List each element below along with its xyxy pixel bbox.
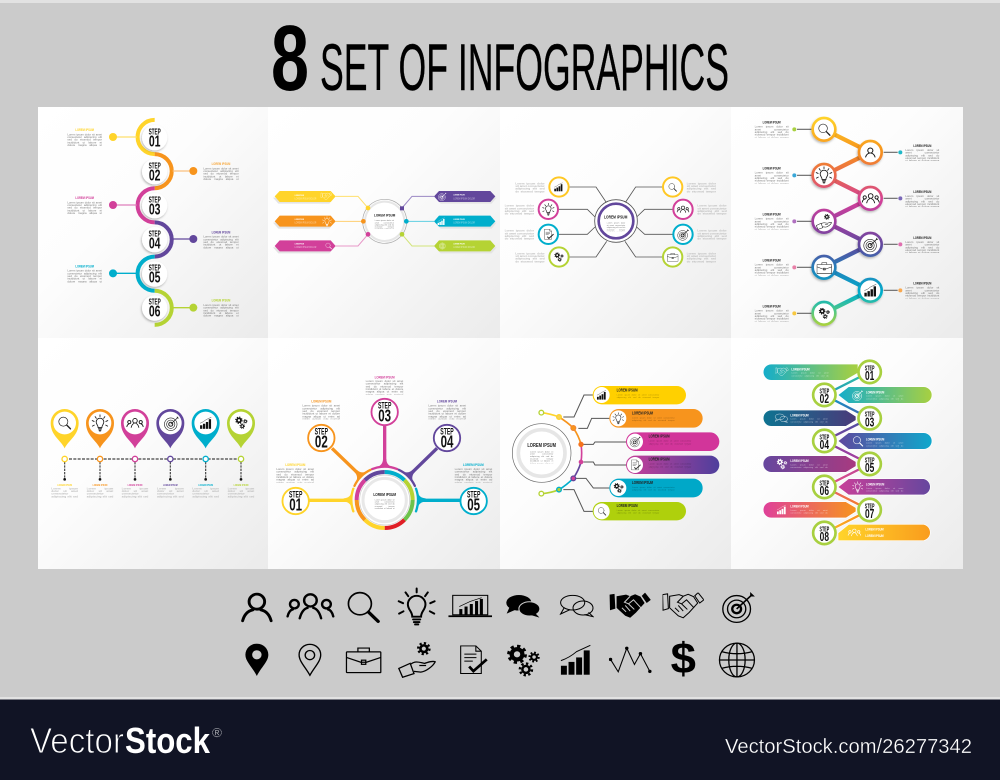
step 01: LOREM IPSUM bbox=[75, 128, 94, 132]
icon: document check bbox=[461, 646, 487, 673]
bar row 3 bbox=[763, 410, 856, 426]
bar row 2 bbox=[838, 387, 932, 403]
side text labels: LOREM IPSUM bbox=[763, 305, 781, 309]
hub connector lines bbox=[559, 187, 673, 257]
icon: filled handshake bbox=[610, 593, 651, 618]
step 02 arm: 02 bbox=[315, 433, 328, 452]
step 04: 04 bbox=[820, 438, 829, 452]
step 02 bbox=[813, 384, 836, 406]
bar row 2: LOREM IPSUM bbox=[866, 390, 884, 394]
icon: briefcase bbox=[346, 648, 381, 673]
side text labels: LOREM IPSUM bbox=[763, 259, 781, 263]
step 01 arm: STEP bbox=[289, 489, 302, 500]
bar: orange: LOREM IPSUM bbox=[295, 219, 304, 221]
step 05 arm: 05 bbox=[467, 496, 480, 515]
step 07: STEP bbox=[865, 503, 875, 511]
step 07 bbox=[858, 499, 881, 521]
big circle: LOREM IPSUM bbox=[527, 443, 556, 449]
bar row 1 bbox=[763, 364, 858, 380]
pill: yellow chart bbox=[593, 386, 686, 404]
pin: yellow search bbox=[51, 409, 79, 448]
bar: purple: LOREM IPSUM bbox=[453, 195, 465, 197]
bar: yellow bbox=[273, 191, 336, 204]
title: 8 bbox=[271, 6, 309, 110]
side text blocks bbox=[755, 125, 939, 322]
top light strip bbox=[0, 0, 1000, 3]
bar row 7: LOREM IPSUM bbox=[790, 505, 809, 509]
bar row 6 bbox=[838, 479, 930, 495]
icon set bbox=[243, 588, 755, 683]
step 05 arm: STEP bbox=[467, 489, 480, 500]
segmented ring bbox=[357, 472, 413, 528]
bar: yellow: LOREM IPSUM bbox=[295, 195, 304, 197]
step labels: LOREM IPSUM bbox=[311, 399, 332, 404]
central circle bbox=[360, 475, 410, 525]
pill: orange bulb: LOREM IPSUM bbox=[632, 410, 653, 415]
step 06: 06 bbox=[149, 303, 161, 320]
step 01: 01 bbox=[149, 132, 161, 150]
pill: orange bulb bbox=[609, 409, 703, 428]
step 01 bbox=[858, 361, 881, 383]
step 03 arm bbox=[371, 399, 398, 469]
wave arcs bbox=[138, 120, 172, 325]
step 05 arm bbox=[416, 488, 487, 515]
arc segments bbox=[541, 413, 582, 494]
node: people bbox=[859, 187, 882, 210]
step 05: 05 bbox=[149, 269, 161, 286]
step 03 arm: STEP bbox=[378, 400, 391, 411]
step 01: STEP bbox=[149, 128, 161, 137]
bar: purple: LOREM IPSUM DOLOR bbox=[453, 196, 475, 200]
icon: zigzag line bbox=[609, 647, 652, 673]
icon ring: chart bbox=[549, 177, 569, 197]
central hub bbox=[595, 200, 637, 242]
bar: cyan bbox=[434, 216, 497, 229]
step 01 bbox=[67, 125, 167, 150]
step 06 bbox=[813, 476, 836, 498]
step 08: 08 bbox=[820, 530, 829, 544]
step 08: STEP bbox=[819, 526, 829, 534]
step 03: 03 bbox=[149, 200, 161, 218]
panel 5: map pins timeline bbox=[38, 338, 268, 569]
pill: cyan gears: LOREM IPSUM bbox=[632, 480, 653, 485]
bar row 8 bbox=[838, 524, 930, 541]
pin labels: LOREM IPSUM bbox=[234, 483, 249, 487]
pin labels: LOREM IPSUM bbox=[198, 483, 214, 487]
step 06: LOREM IPSUM bbox=[212, 299, 230, 303]
step labels: LOREM IPSUM bbox=[285, 462, 306, 467]
step 05 bbox=[858, 453, 881, 475]
icon: search bbox=[348, 593, 378, 621]
step 05 bbox=[67, 261, 167, 287]
node: chart bbox=[859, 279, 882, 302]
node: gears bbox=[813, 302, 835, 325]
step labels: LOREM IPSUM bbox=[463, 462, 484, 467]
icon ring: search bbox=[663, 177, 682, 197]
central circle bbox=[363, 199, 407, 243]
bar: yellow: LOREM IPSUM DOLOR bbox=[295, 196, 316, 200]
icon: filled pin bbox=[245, 644, 268, 676]
grey text blocks bbox=[505, 182, 727, 263]
icon ring: bulb bbox=[539, 200, 558, 219]
step 02: 02 bbox=[820, 392, 829, 406]
pin: cyan chart bbox=[192, 409, 220, 448]
bar row 3: LOREM IPSUM bbox=[790, 413, 809, 417]
big circle bbox=[512, 424, 571, 482]
bar row 5 bbox=[763, 456, 856, 472]
panel 1: six step wave timeline bbox=[38, 107, 268, 338]
panel 7: arc with pills bbox=[500, 338, 731, 569]
step 04 arm: 04 bbox=[441, 433, 454, 452]
step 05: STEP bbox=[865, 457, 875, 465]
pin text blocks bbox=[51, 487, 254, 498]
step 03 bbox=[858, 407, 881, 430]
title bbox=[271, 6, 729, 110]
dashed timeline bbox=[65, 457, 241, 461]
node: bulb bbox=[813, 164, 835, 187]
pill: purple document bbox=[626, 456, 719, 474]
pin: magenta people bbox=[121, 409, 149, 448]
pill: magenta target bbox=[626, 432, 719, 451]
panel 3: circle hub with icon rings bbox=[500, 107, 731, 338]
icon: rising bar chart bbox=[561, 645, 590, 675]
footer logo: Stock bbox=[125, 720, 211, 761]
side text labels: LOREM IPSUM bbox=[913, 144, 931, 148]
connector lines bbox=[563, 395, 626, 511]
connector nodes bbox=[361, 206, 409, 237]
step text blocks bbox=[276, 380, 492, 483]
pill: yellow chart: LOREM IPSUM bbox=[617, 387, 638, 392]
icon: gears bbox=[509, 646, 539, 675]
step 03 arm: 03 bbox=[378, 407, 391, 426]
side connectors and dots bbox=[792, 127, 902, 315]
step 03: STEP bbox=[149, 196, 161, 205]
step 02: 02 bbox=[149, 166, 161, 184]
step 04 bbox=[813, 430, 836, 452]
icon ring: briefcase bbox=[663, 247, 682, 267]
zigzag connector bbox=[824, 129, 870, 313]
footer light strip bbox=[0, 697, 1000, 700]
icon: globe bbox=[719, 643, 754, 677]
pin labels: LOREM IPSUM bbox=[128, 483, 143, 487]
arc nodes bbox=[539, 410, 584, 496]
step 02: STEP bbox=[819, 388, 829, 396]
panel 2: hexagon bars around a circle bbox=[268, 107, 500, 338]
icon: laptop chart bbox=[448, 595, 492, 616]
node: target bbox=[859, 233, 882, 256]
bar row 6: LOREM IPSUM bbox=[866, 483, 884, 487]
step 06 bbox=[142, 295, 239, 321]
bar: cyan: LOREM IPSUM bbox=[453, 219, 465, 221]
step labels: LOREM IPSUM bbox=[375, 374, 395, 379]
step 06: STEP bbox=[149, 298, 161, 307]
icon: hand with gear bbox=[399, 643, 435, 677]
icon: filled speech bubbles bbox=[506, 595, 540, 618]
pill: purple document: LOREM IPSUM bbox=[649, 457, 670, 462]
panel 6: radial five steps bbox=[268, 338, 500, 569]
central circle: LOREM IPSUM bbox=[374, 213, 396, 218]
step 01 arm bbox=[282, 488, 353, 515]
step 08 bbox=[813, 522, 836, 544]
step 05: LOREM IPSUM bbox=[75, 264, 94, 268]
step 02 bbox=[142, 159, 239, 184]
side text labels: LOREM IPSUM bbox=[913, 282, 931, 286]
step 07: 07 bbox=[865, 507, 874, 521]
bar: lime: LOREM IPSUM DOLOR bbox=[453, 245, 475, 249]
pin: purple target bbox=[156, 409, 184, 448]
pin labels: LOREM IPSUM bbox=[163, 483, 178, 487]
bar row 8: LOREM IPSUM bbox=[865, 534, 884, 538]
node: briefcase bbox=[813, 256, 835, 279]
node: search bbox=[813, 118, 835, 141]
icon ring: people bbox=[673, 200, 693, 219]
step labels: LOREM IPSUM bbox=[437, 399, 457, 404]
bar: magenta: LOREM IPSUM DOLOR bbox=[295, 245, 316, 249]
pin labels: LOREM IPSUM bbox=[57, 483, 73, 487]
step 03 bbox=[67, 193, 167, 218]
step 01: 01 bbox=[865, 369, 874, 383]
step 02 arm bbox=[308, 425, 371, 486]
icon: outline speech bubbles bbox=[561, 595, 593, 617]
vertical dashed drops bbox=[63, 462, 242, 481]
icon: outline handshake bbox=[663, 593, 704, 618]
bar row 8: LOREM IPSUM bbox=[865, 528, 884, 532]
bar row 4 bbox=[838, 433, 932, 449]
step 05: 05 bbox=[865, 461, 874, 475]
icon: target bbox=[723, 592, 755, 622]
bar: purple bbox=[434, 191, 497, 204]
side text labels bbox=[763, 121, 931, 309]
bar row 5: LOREM IPSUM bbox=[790, 459, 809, 463]
step 06: STEP bbox=[819, 480, 829, 488]
icon ring: target bbox=[673, 225, 693, 244]
bar: magenta bbox=[273, 240, 336, 253]
bar: lime bbox=[434, 240, 497, 253]
icon: user bbox=[243, 594, 271, 621]
pill: cyan gears bbox=[609, 479, 703, 497]
bar: lime: LOREM IPSUM bbox=[453, 243, 465, 245]
side text labels: LOREM IPSUM bbox=[763, 121, 781, 125]
panel 8: eight steps with gradient bars bbox=[731, 338, 963, 569]
side text labels: LOREM IPSUM bbox=[763, 167, 781, 171]
pin: orange bulb bbox=[86, 409, 114, 448]
icon: people bbox=[288, 594, 333, 618]
icon ring: document bbox=[539, 225, 558, 244]
step 03: 03 bbox=[865, 416, 874, 430]
step 04: STEP bbox=[819, 434, 829, 442]
step 04: 04 bbox=[149, 234, 161, 252]
step 06: 06 bbox=[820, 484, 829, 498]
icon ring: gears bbox=[549, 247, 569, 267]
step 02: LOREM IPSUM bbox=[212, 162, 230, 166]
step 01 arm: 01 bbox=[289, 496, 302, 515]
footer logo: Vector bbox=[30, 720, 124, 761]
bar: orange: LOREM IPSUM DOLOR bbox=[295, 221, 316, 225]
bar row 7 bbox=[763, 502, 856, 518]
footer logo bbox=[30, 720, 222, 761]
footer image id: VectorStock.com/26277342 bbox=[725, 736, 972, 758]
pin labels: LOREM IPSUM bbox=[93, 483, 108, 487]
footer bar bbox=[0, 700, 1000, 780]
pill: magenta target: LOREM IPSUM bbox=[649, 434, 670, 439]
bar: orange bbox=[273, 216, 336, 229]
step 04: LOREM IPSUM bbox=[212, 230, 230, 234]
central hub: LOREM IPSUM bbox=[604, 215, 627, 220]
node: user bbox=[859, 141, 882, 164]
step 04 arm bbox=[399, 425, 460, 486]
bar row 1: LOREM IPSUM bbox=[791, 367, 810, 371]
icon: dollar: $ bbox=[671, 635, 696, 683]
bar: magenta: LOREM IPSUM bbox=[295, 243, 304, 245]
icon: outline pin bbox=[299, 644, 321, 675]
step 04 bbox=[142, 227, 239, 252]
step 02 arm: STEP bbox=[315, 426, 328, 437]
connector lines bbox=[336, 196, 434, 246]
footer logo: ® bbox=[212, 725, 222, 740]
step 03: LOREM IPSUM bbox=[75, 196, 94, 200]
step 02: STEP bbox=[149, 162, 161, 171]
side text labels: LOREM IPSUM bbox=[763, 213, 781, 217]
icon: light bulb bbox=[399, 588, 435, 624]
side text labels: LOREM IPSUM bbox=[913, 236, 931, 240]
step 05: STEP bbox=[149, 264, 161, 273]
step 01: STEP bbox=[865, 365, 875, 373]
step 04 arm: STEP bbox=[440, 426, 454, 437]
pin labels bbox=[57, 483, 249, 487]
node: hand with gear bbox=[813, 210, 835, 233]
zigzag connector bbox=[824, 372, 870, 533]
bar: cyan: LOREM IPSUM DOLOR bbox=[453, 221, 475, 225]
pill: lime search: LOREM IPSUM bbox=[617, 503, 638, 508]
step 03: STEP bbox=[865, 412, 875, 419]
step labels bbox=[285, 374, 484, 467]
step 04: STEP bbox=[149, 230, 161, 239]
timeline nodes bbox=[62, 456, 244, 462]
pill: lime search bbox=[593, 502, 686, 520]
central circle: LOREM IPSUM bbox=[373, 492, 396, 497]
panel 4: zigzag chain of icons bbox=[731, 107, 963, 338]
bar row 4: LOREM IPSUM bbox=[866, 437, 884, 441]
side text labels: LOREM IPSUM bbox=[913, 190, 931, 194]
pin: lime gears bbox=[227, 409, 255, 448]
